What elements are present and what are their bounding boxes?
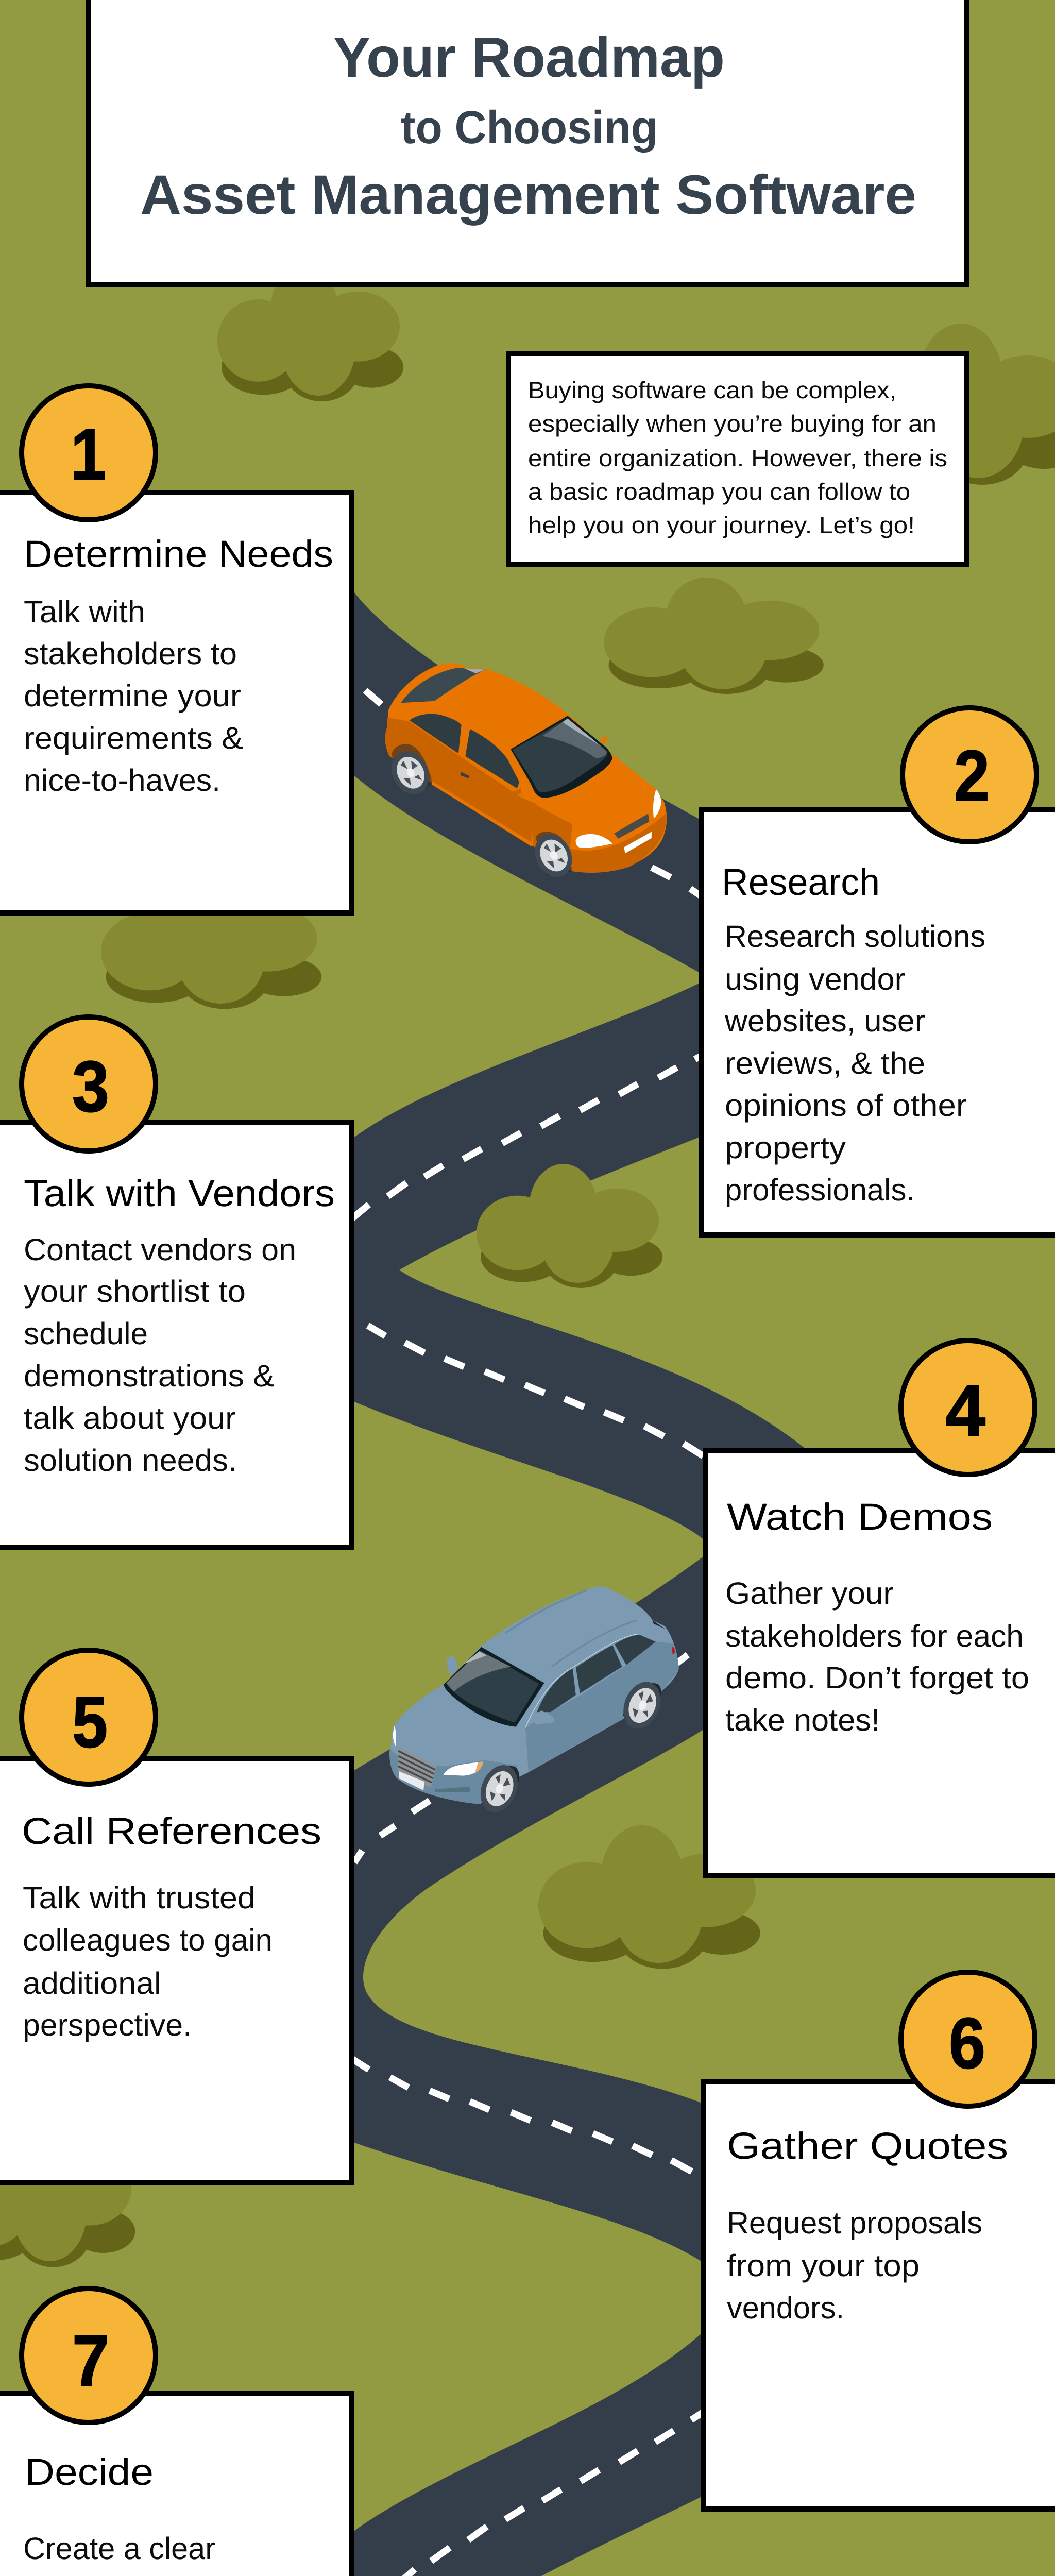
text block: introduction copy: a basic roadmap you can follow to — [528, 478, 910, 505]
text block: introduction copy: help you on your journey. Let’s go! — [528, 512, 915, 538]
heading: title line 1: Your Roadmap — [333, 26, 725, 89]
text block: step 1 copy: determine your — [24, 679, 241, 713]
text block: introduction copy: entire organization. However, there is — [528, 445, 947, 471]
text block: step 4 copy: demo. Don’t forget to — [725, 1660, 1029, 1695]
number badge 5: 5 — [72, 1682, 108, 1762]
text block: step 2 copy — [724, 919, 985, 1207]
heading: title line 2: to Choosing — [401, 102, 658, 154]
text block: step 2 copy: using vendor — [725, 962, 905, 996]
number badge 5 — [22, 1650, 156, 1784]
panel: title — [88, 0, 967, 285]
text block: step 2 copy: opinions of other — [725, 1088, 967, 1123]
heading: title line 3: Asset Management Software — [140, 163, 916, 226]
text block: introduction copy: especially when you’re buying for an — [528, 410, 937, 437]
number badge 7: 7 — [72, 2320, 109, 2401]
text block: step 7 copy — [23, 2531, 328, 2576]
panel: step 5 — [0, 1650, 352, 2182]
number badge 7 — [22, 2289, 156, 2422]
text block: step 2 copy: reviews, & the — [725, 1046, 925, 1080]
road centre dashes — [335, 690, 963, 2576]
heading: Research: Research — [722, 861, 880, 903]
text block: step 3 copy: solution needs. — [24, 1443, 237, 1478]
text block: introduction copy: Buying software can be complex, — [528, 377, 896, 403]
bush: on the road bend — [477, 1164, 662, 1288]
text block: step 3 copy — [24, 1232, 296, 1478]
text block: step 1 copy: stakeholders to — [24, 636, 237, 671]
number badge 6: 6 — [949, 2003, 985, 2083]
heading: Watch Demos: Watch Demos — [727, 1496, 993, 1538]
panel: step 7 — [0, 2289, 352, 2576]
text block: step 4 copy: Gather your — [725, 1576, 894, 1611]
text block: step 3 copy: talk about your — [24, 1401, 236, 1435]
text block: step 4 copy: take notes! — [725, 1703, 880, 1737]
panel: step 3 — [0, 1017, 352, 1548]
text block: step 6 copy: Request proposals — [727, 2206, 982, 2240]
text block: step 3 copy: schedule — [24, 1316, 148, 1351]
text block: step 2 copy: property — [725, 1130, 846, 1165]
number badge 4: 4 — [945, 1370, 985, 1451]
number badge 4 — [901, 1341, 1035, 1475]
number badge 2 — [903, 708, 1036, 842]
panel: step 6 — [704, 1972, 1055, 2509]
number badge 1 — [22, 386, 156, 520]
text block: introduction copy — [528, 377, 947, 538]
text block: step 7 copy: Create a clear — [23, 2531, 215, 2566]
heading: Decide: Decide — [25, 2451, 154, 2493]
heading: Gather Quotes: Gather Quotes — [727, 2125, 1008, 2167]
text block: step 1 copy — [24, 595, 243, 798]
bush: under step 1 — [101, 880, 321, 1009]
bush: under step 5 — [0, 2124, 135, 2267]
text block: step 5 copy: Talk with trusted — [23, 1880, 256, 1915]
text block: step 3 copy: demonstrations & — [24, 1359, 275, 1393]
panel: introduction — [508, 353, 967, 565]
panel: step 2 — [702, 708, 1055, 1235]
text block: step 6 copy: from your top — [727, 2248, 920, 2283]
number badge 1: 1 — [71, 414, 106, 495]
heading: Talk with Vendors: Talk with Vendors — [24, 1173, 335, 1214]
bush: under step 4 — [538, 1825, 760, 1969]
text block: step 5 copy: colleagues to gain — [23, 1923, 273, 1957]
panel: step 1 — [0, 386, 352, 913]
text block: step 4 copy — [725, 1576, 1029, 1737]
text block: step 1 copy: nice-to-haves. — [24, 763, 220, 798]
bush: under the title — [217, 264, 403, 401]
number badge 2: 2 — [954, 735, 990, 816]
number badge 6 — [901, 1972, 1035, 2106]
icon: blue SUV — [389, 1586, 679, 1815]
icon: orange hatchback car — [385, 663, 667, 880]
winding road — [215, 515, 1055, 2576]
text block: step 5 copy: additional — [23, 1966, 161, 2001]
text block: step 1 copy: requirements & — [24, 721, 243, 755]
text block: step 3 copy: Contact vendors on — [24, 1232, 296, 1267]
text block: step 6 copy: vendors. — [727, 2291, 844, 2325]
heading: Determine Needs: Determine Needs — [24, 533, 333, 575]
text block: step 4 copy: stakeholders for each — [725, 1619, 1024, 1653]
text block: step 2 copy: Research solutions — [725, 919, 985, 954]
text block: step 5 copy: perspective. — [23, 2008, 192, 2042]
text block: step 6 copy — [727, 2206, 982, 2325]
number badge 3 — [22, 1017, 156, 1151]
text block: step 2 copy: websites, user — [724, 1004, 925, 1038]
bush: beside the orange car — [604, 578, 824, 694]
bush: behind the intro box — [854, 324, 1055, 485]
text block: step 2 copy: professionals. — [725, 1173, 915, 1207]
number badge 3: 3 — [72, 1046, 109, 1127]
text block: step 1 copy: Talk with — [24, 595, 145, 629]
text block: step 5 copy — [23, 1880, 273, 2042]
text block: step 3 copy: your shortlist to — [24, 1274, 246, 1309]
heading: Call References: Call References — [22, 1810, 321, 1852]
panel: step 4 — [705, 1341, 1055, 1876]
